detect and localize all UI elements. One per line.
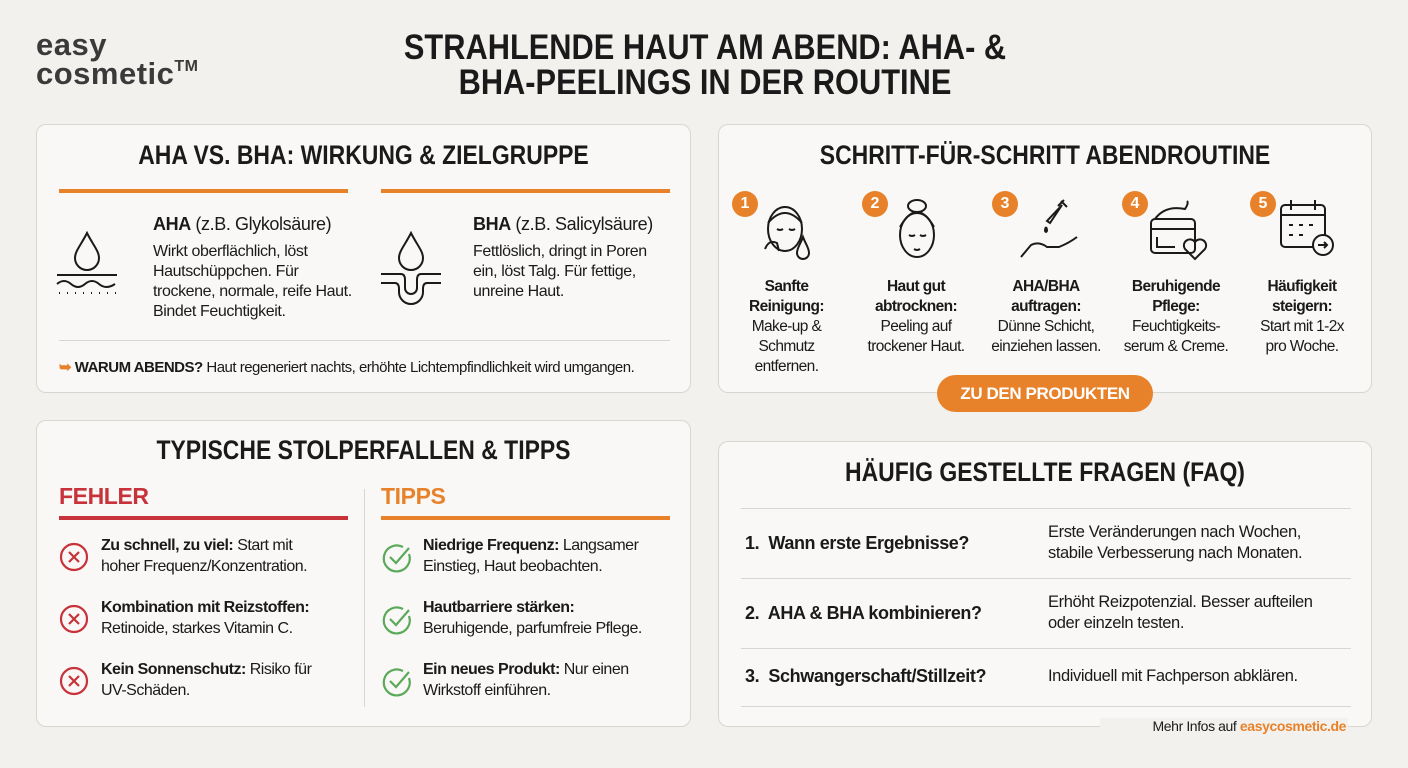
text: AHA bbox=[153, 214, 352, 320]
faq 3: 3. Schwangerschaft/Stillzeit? bbox=[745, 666, 986, 686]
faq 3 bbox=[745, 666, 1298, 686]
step 5: steigern: bbox=[1272, 298, 1332, 315]
icon: AHA drop on skin bbox=[56, 230, 117, 294]
item: Einstieg, Haut beobachten. bbox=[423, 558, 602, 575]
item: UV-Schäden. bbox=[101, 682, 190, 699]
step 5: pro Woche. bbox=[1266, 338, 1338, 355]
step 5: Start mit 1-2x bbox=[1260, 318, 1344, 335]
step 2: trockener Haut. bbox=[868, 338, 964, 355]
step 4: Pflege: bbox=[1152, 298, 1200, 315]
faq 2: oder einzeln testen. bbox=[1048, 614, 1184, 632]
faq 2: 2. AHA & BHA kombinieren? bbox=[745, 603, 982, 623]
step 2: abtrocknen: bbox=[875, 298, 957, 315]
column: tipps bbox=[381, 483, 670, 699]
text: AHA: Hautschüppchen. Für bbox=[153, 263, 298, 280]
step 3: AHA/BHA bbox=[1012, 278, 1080, 295]
item: Wirkstoff einführen. bbox=[423, 682, 551, 699]
faq 3: Individuell mit Fachperson abklären. bbox=[1048, 667, 1298, 685]
column: tipps: TIPPS bbox=[381, 483, 445, 509]
faq 2: Erhöht Reizpotenzial. Besser aufteilen bbox=[1048, 593, 1313, 611]
item: Niedrige Frequenz: Langsamer bbox=[423, 537, 638, 554]
faq 1: 1. Wann erste Ergebnisse? bbox=[745, 533, 969, 553]
item bbox=[382, 599, 642, 637]
text: AHA: Bindet Feuchtigkeit. bbox=[153, 303, 286, 320]
step 3: 3 bbox=[1001, 195, 1009, 212]
logo bbox=[36, 27, 199, 91]
title bbox=[404, 28, 1006, 102]
faq 1: stabile Verbesserung nach Monaten. bbox=[1048, 544, 1302, 562]
faq 1 bbox=[745, 523, 1302, 562]
step 1 bbox=[732, 191, 824, 375]
step 1: Reinigung: bbox=[749, 298, 824, 315]
item bbox=[382, 537, 639, 575]
text: BHA: ein, löst Talg. Für fettige, bbox=[473, 263, 636, 280]
panel: stolperfallen bbox=[36, 420, 691, 727]
text: BHA bbox=[473, 214, 653, 300]
title: STRAHLENDE HAUT AM ABEND: AHA- & bbox=[404, 28, 1006, 67]
item: Zu schnell, zu viel: Start mit bbox=[101, 537, 292, 554]
faq 2 bbox=[745, 593, 1313, 632]
item bbox=[60, 661, 312, 699]
item: Retinoide, starkes Vitamin C. bbox=[101, 620, 293, 637]
item: Ein neues Produkt: Nur einen bbox=[423, 661, 629, 678]
item: Beruhigende, parfumfreie Pflege. bbox=[423, 620, 642, 637]
button: zu den produkten bbox=[937, 375, 1153, 412]
step 3: Dünne Schicht, bbox=[998, 318, 1094, 335]
step 1: Sanfte bbox=[765, 278, 808, 295]
heading: TYPISCHE STOLPERFALLEN & TIPPS bbox=[156, 435, 571, 465]
step 2: Haut gut bbox=[887, 278, 945, 295]
title: BHA-PEELINGS IN DER ROUTINE bbox=[459, 63, 951, 102]
item: Kombination mit Reizstoffen: bbox=[101, 599, 309, 616]
panel: AHA vs BHA bbox=[36, 124, 691, 393]
step 1: 1 bbox=[741, 195, 749, 212]
text: AHA: trockene, normale, reife Haut. bbox=[153, 283, 352, 300]
logo: cosmeticTM bbox=[36, 56, 199, 91]
heading: AHA VS. BHA: WIRKUNG & ZIELGRUPPE bbox=[138, 140, 589, 170]
panel: routine bbox=[718, 124, 1372, 393]
step 5 bbox=[1250, 191, 1344, 355]
step 3 bbox=[991, 191, 1101, 355]
step 4: Beruhigende bbox=[1132, 278, 1220, 295]
step 4 bbox=[1122, 191, 1228, 355]
column: fehler: FEHLER bbox=[59, 483, 149, 509]
item bbox=[60, 599, 309, 637]
step 2: Peeling auf bbox=[881, 318, 951, 335]
step 2 bbox=[862, 191, 964, 355]
item bbox=[382, 661, 629, 699]
heading: SCHRITT-FÜR-SCHRITT ABENDROUTINE bbox=[820, 140, 1270, 170]
column: fehler bbox=[59, 483, 348, 699]
step 3: einziehen lassen. bbox=[991, 338, 1101, 355]
text: AHA: Wirkt oberflächlich, löst bbox=[153, 243, 308, 260]
logo: easy bbox=[36, 27, 107, 62]
callout: warum abends: ➥ WARUM ABENDS? Haut regeneriert nachts, erhöhte Lichtempfindlichkeit wird umgangen. bbox=[59, 359, 634, 376]
button: zu den produkten: ZU DEN PRODUKTEN bbox=[960, 384, 1130, 403]
step 3: auftragen: bbox=[1011, 298, 1081, 315]
step 4: serum & Creme. bbox=[1124, 338, 1228, 355]
step 1: Schmutz bbox=[758, 338, 815, 355]
item: hoher Frequenz/Konzentration. bbox=[101, 558, 307, 575]
step 5: 5 bbox=[1259, 195, 1267, 212]
text: BHA: Fettlöslich, dringt in Poren bbox=[473, 243, 647, 260]
step 1: entfernen. bbox=[755, 358, 818, 375]
text: BHA: BHA (z.B. Salicylsäure) bbox=[473, 214, 653, 234]
step 4: Feuchtigkeits- bbox=[1132, 318, 1220, 335]
icon: BHA drop into pore bbox=[381, 230, 441, 305]
item: Hautbarriere stärken: bbox=[423, 599, 574, 616]
item: Kein Sonnenschutz: Risiko für bbox=[101, 661, 311, 678]
text: AHA: AHA (z.B. Glykolsäure) bbox=[153, 214, 331, 234]
text: BHA: unreine Haut. bbox=[473, 283, 564, 300]
panel: FAQ bbox=[718, 441, 1372, 727]
step 4: 4 bbox=[1131, 195, 1139, 212]
step 2: 2 bbox=[871, 195, 879, 212]
item bbox=[60, 537, 307, 575]
step 5: Häufigkeit bbox=[1268, 278, 1336, 295]
faq 1: Erste Veränderungen nach Wochen, bbox=[1048, 523, 1301, 541]
step 1: Make-up & bbox=[752, 318, 821, 335]
footer: Mehr Infos auf easycosmetic.de bbox=[1153, 718, 1346, 734]
heading: HÄUFIG GESTELLTE FRAGEN (FAQ) bbox=[845, 457, 1245, 487]
